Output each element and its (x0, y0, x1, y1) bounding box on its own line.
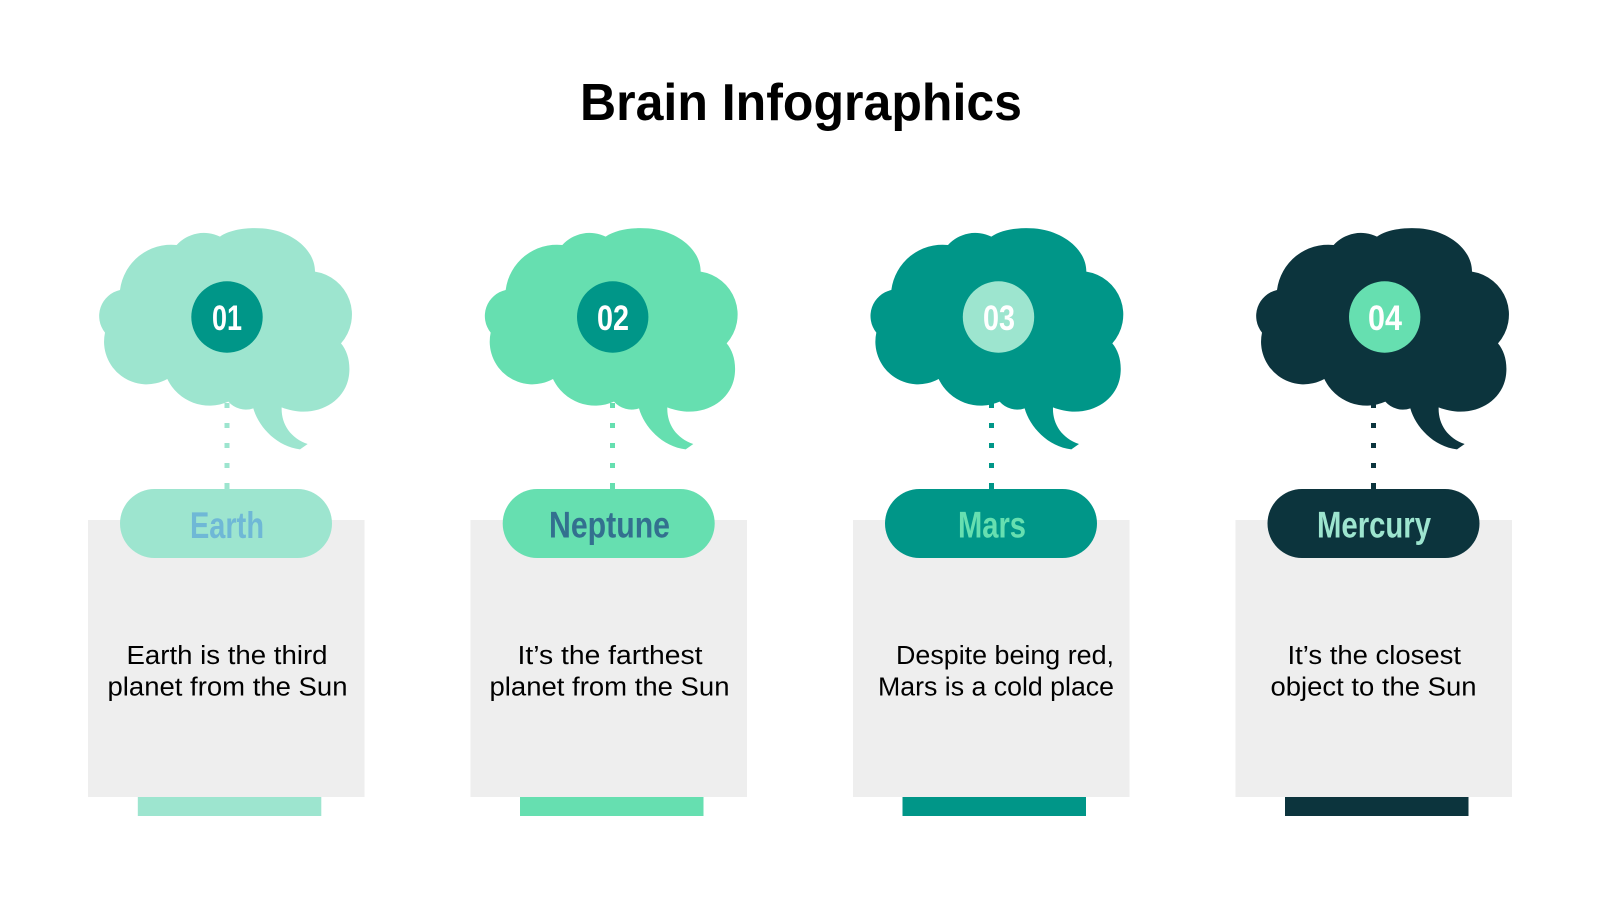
number badge 04: 04 (1368, 299, 1402, 338)
icon: brain Mercury (1256, 228, 1509, 449)
description: Earth: Earth is the third (126, 642, 328, 670)
number badge 02: 02 (597, 299, 629, 338)
description: Earth: planet from the Sun (108, 674, 348, 702)
label pill: Mars: Mars (958, 504, 1026, 546)
description: Mercury: object to the Sun (1270, 674, 1476, 702)
accent bar: Mercury (1285, 797, 1468, 816)
number badge 04 (1349, 281, 1420, 353)
number badge 01 (191, 281, 263, 353)
description: Mars (878, 642, 1114, 702)
accent bar: Neptune (520, 797, 704, 816)
dotted connector: Mercury (1371, 403, 1376, 489)
icon: brain Mars (870, 228, 1123, 449)
icon: brain Neptune (485, 228, 738, 449)
label pill: Earth (120, 489, 332, 558)
title: Brain Infographics (580, 74, 1022, 132)
dotted connector: Neptune (610, 403, 615, 489)
description: Earth (108, 642, 348, 702)
accent bar: Mars (902, 797, 1086, 816)
label pill: Mercury (1268, 489, 1480, 558)
panel: Mercury (1236, 520, 1512, 797)
description: Mars: Despite being red, (896, 642, 1114, 670)
panel: Mars (853, 520, 1130, 797)
label pill: Mercury: Mercury (1317, 504, 1431, 546)
column: Mars (853, 228, 1130, 816)
label pill: Earth: Earth (190, 505, 264, 546)
number badge 03: 03 (983, 299, 1015, 338)
icon: brain Earth (99, 228, 352, 449)
label pill: Mars (885, 489, 1097, 558)
description: Mercury (1270, 642, 1476, 702)
description: Neptune: planet from the Sun (490, 674, 730, 702)
column: Mercury (1236, 228, 1512, 816)
number badge 01: 01 (212, 299, 242, 338)
label pill: Neptune (503, 489, 715, 558)
label pill: Neptune: Neptune (549, 504, 670, 546)
column: Earth (88, 228, 364, 816)
column: Neptune (470, 228, 747, 816)
description: Neptune: It’s the farthest (518, 642, 702, 670)
panel: Neptune (470, 520, 747, 797)
accent bar: Earth (138, 797, 321, 816)
dotted connector: Earth (224, 403, 230, 489)
panel: Earth (88, 520, 364, 797)
number badge 02 (577, 281, 648, 353)
description: Neptune (490, 642, 730, 702)
description: Mars: Mars is a cold place (878, 674, 1114, 702)
number badge 03 (963, 281, 1034, 353)
description: Mercury: It’s the closest (1288, 642, 1461, 670)
dotted connector: Mars (989, 403, 994, 489)
